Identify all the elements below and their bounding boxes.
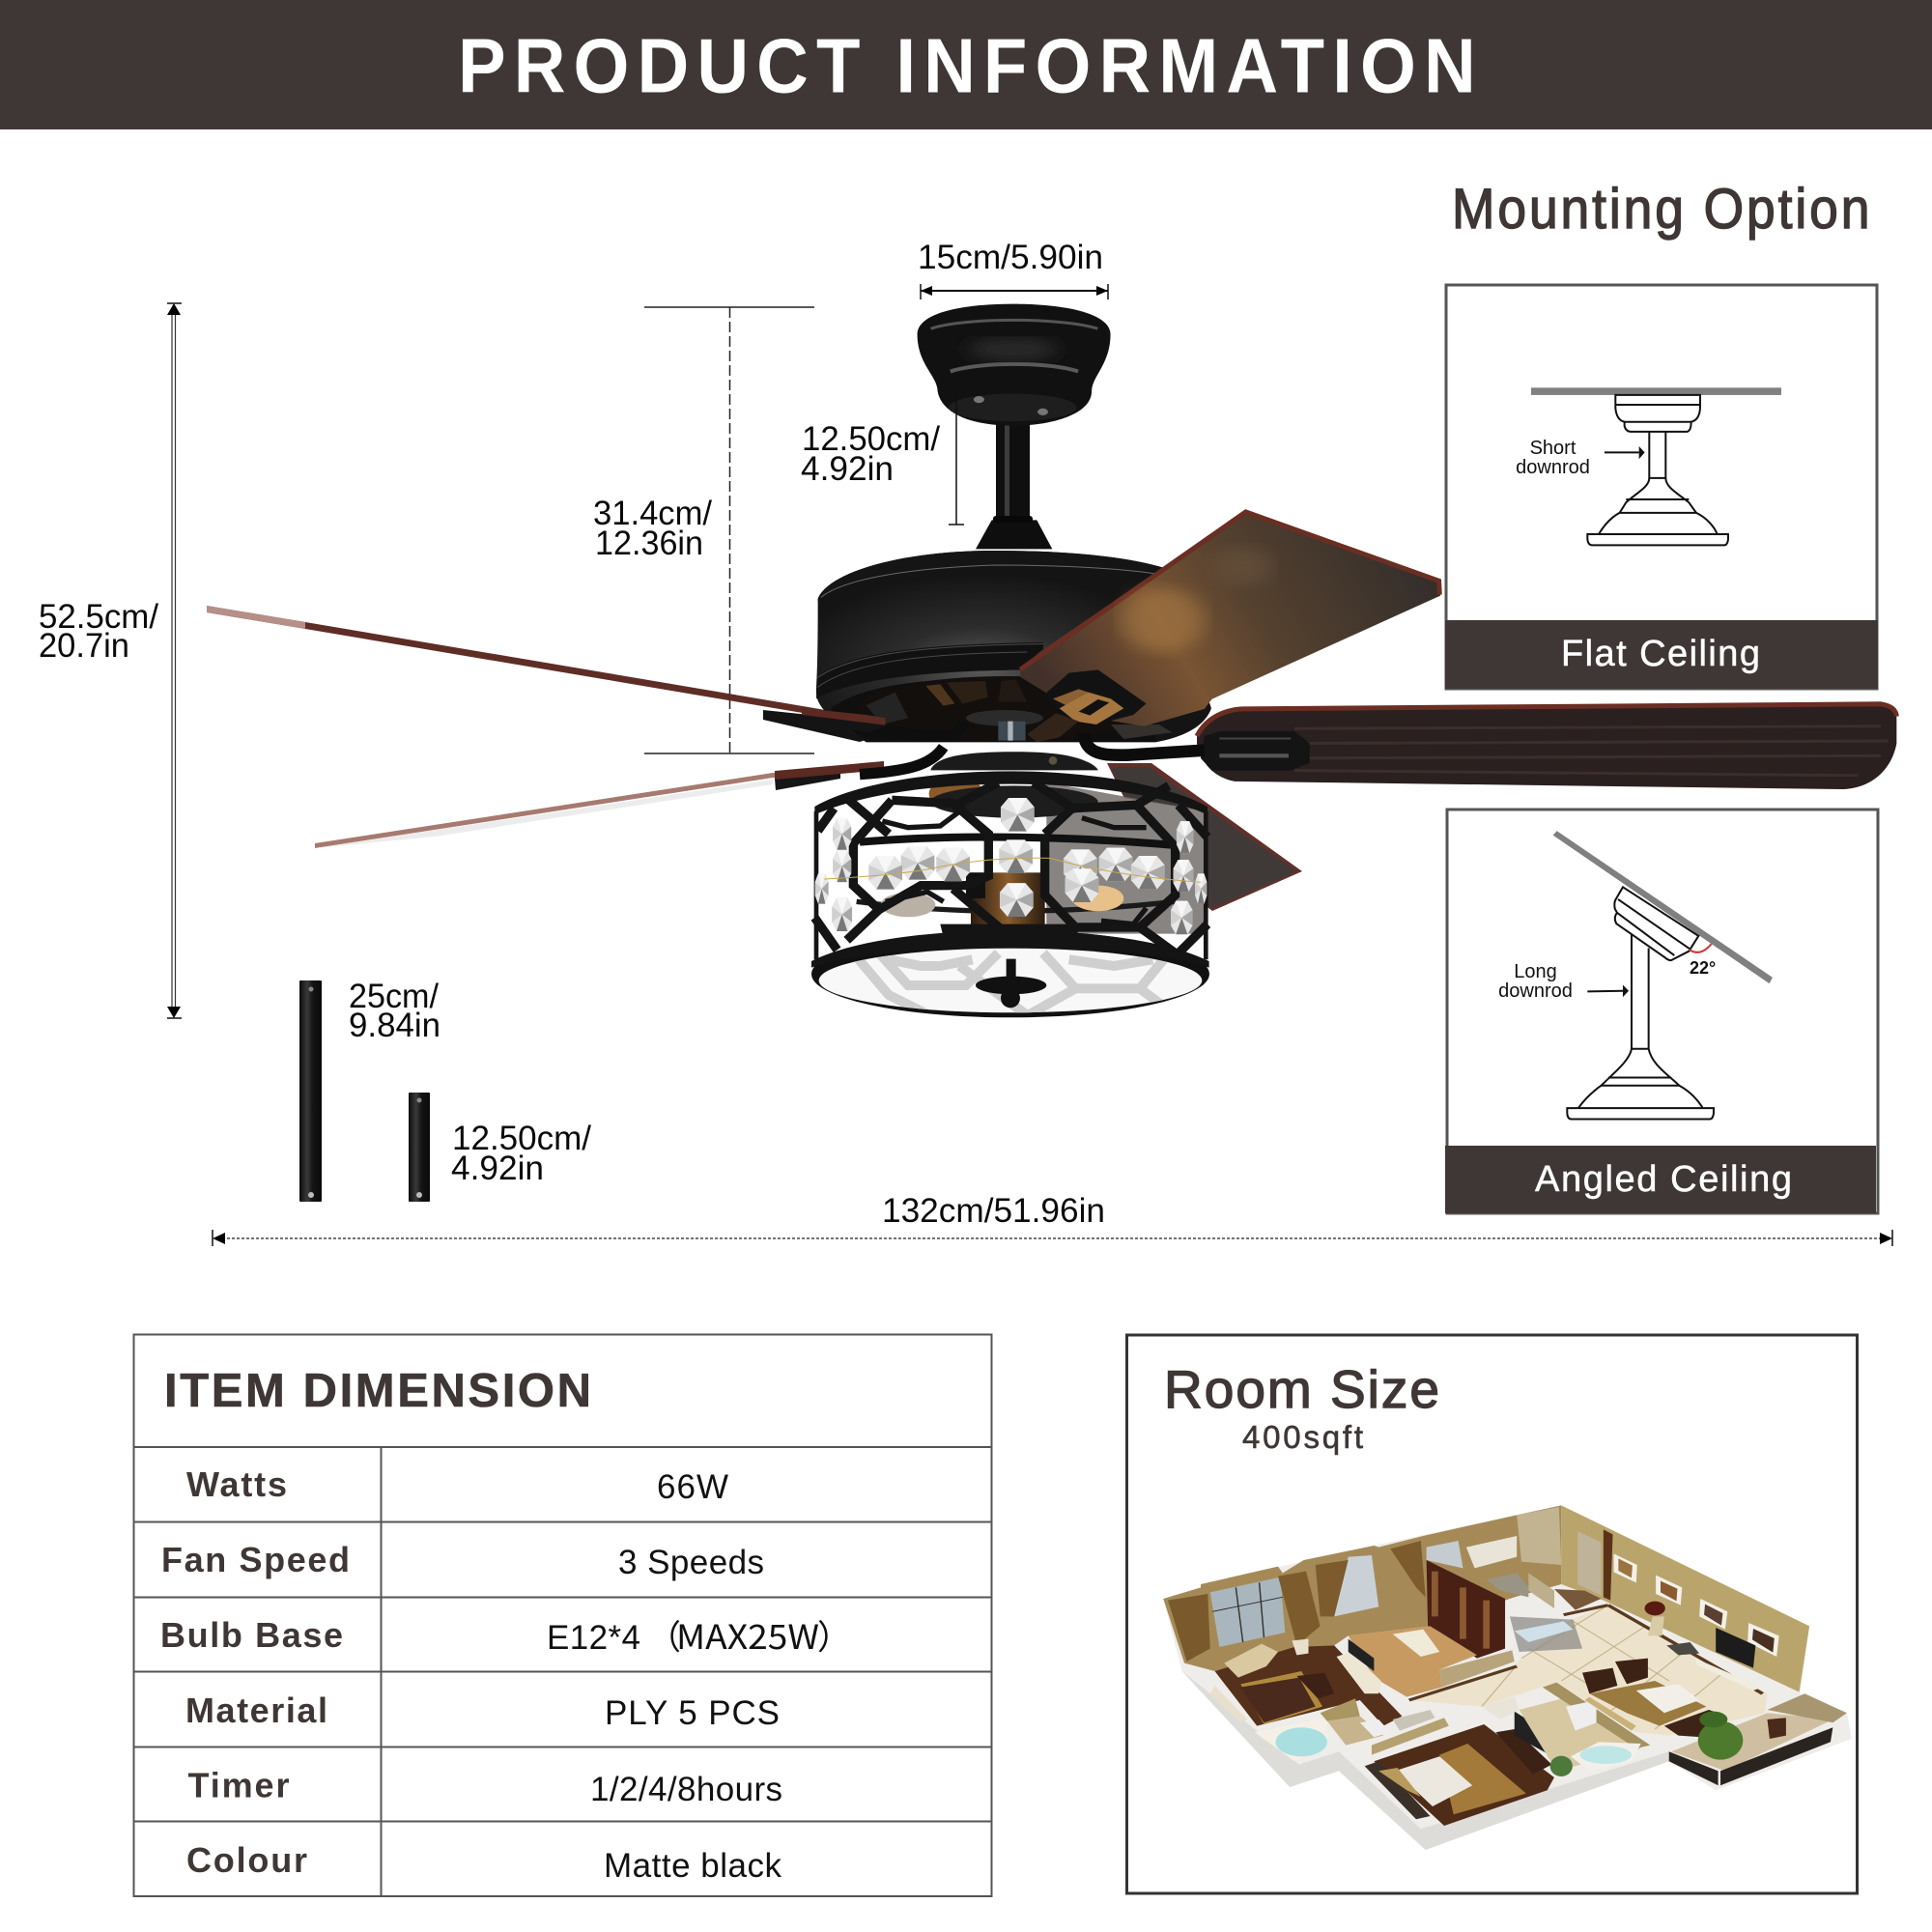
panel: angled ceiling: Long xyxy=(1514,961,1557,982)
overall height dimension: 20.7in xyxy=(39,627,129,665)
long downrod xyxy=(299,978,440,1202)
row: bulb base: ） xyxy=(817,1619,851,1657)
row: material: Material xyxy=(185,1690,327,1730)
panel: angled ceiling: downrod xyxy=(1498,980,1573,1002)
title: PRODUCT INFORMATION xyxy=(458,23,1476,109)
canopy width dimension xyxy=(918,239,1108,299)
row: fan speed: Fan Speed xyxy=(161,1540,350,1579)
panel: room size xyxy=(1126,1335,1857,1893)
fan blade: lower left thin xyxy=(315,761,884,848)
room size heading: Room Size xyxy=(1164,1359,1439,1419)
panel: flat ceiling xyxy=(1445,285,1878,689)
lamp interior xyxy=(814,778,1208,959)
fan blade: upper right with bracket xyxy=(1020,512,1440,726)
row: fan speed xyxy=(161,1540,764,1581)
row: timer xyxy=(187,1766,782,1808)
room size value: 400sqft xyxy=(1242,1419,1363,1455)
canopy drop dimension: 12.50cm/ xyxy=(802,420,940,458)
lattice xyxy=(814,782,1208,959)
long downrod: 9.84in xyxy=(349,1007,440,1044)
body height dimension: 12.36in xyxy=(595,525,703,562)
bottom finial xyxy=(976,959,1046,1008)
fan blade: right horizontal xyxy=(1197,704,1896,789)
panel: angled ceiling xyxy=(1445,810,1878,1213)
lamp cage with crystals xyxy=(811,753,1209,1017)
row: bulb base xyxy=(160,1610,851,1660)
angled ceiling diagram xyxy=(1553,831,1773,1119)
row: watts: 66W xyxy=(657,1468,728,1506)
row: colour: Matte black xyxy=(604,1847,782,1885)
panel: angled ceiling: 22° xyxy=(1690,958,1716,978)
floor plan illustration xyxy=(1163,1505,1852,1850)
ceiling canopy xyxy=(918,304,1111,426)
bottom glass xyxy=(811,930,1209,1017)
row: bulb base: E12*4 xyxy=(547,1619,640,1657)
fan downrod xyxy=(993,386,1033,523)
fan blade: rear right xyxy=(1107,763,1302,911)
row: colour xyxy=(186,1840,782,1885)
table heading: ITEM DIMENSION xyxy=(164,1365,591,1417)
row: fan speed: 3 Speeds xyxy=(618,1544,764,1581)
fan arms and hub xyxy=(802,708,1205,775)
overall width dimension: 132cm/51.96in xyxy=(882,1192,1105,1230)
crystals xyxy=(815,798,1207,934)
row: bulb base: MAX25W xyxy=(676,1610,819,1660)
body height dimension xyxy=(593,307,814,753)
short downrod: 4.92in xyxy=(451,1150,544,1187)
angled ceiling caption: Angled Ceiling xyxy=(1535,1159,1792,1200)
short downrod: 12.50cm/ xyxy=(452,1120,591,1157)
flat ceiling diagram xyxy=(1531,387,1781,545)
row: material xyxy=(185,1690,780,1732)
short downrod xyxy=(409,1093,591,1202)
row: colour: Colour xyxy=(186,1840,307,1880)
overall height dimension: 52.5cm/ xyxy=(39,598,158,636)
panel: item dimension table xyxy=(133,1335,992,1896)
row: bulb base: （ xyxy=(647,1619,681,1657)
row: material: PLY 5 PCS xyxy=(605,1694,780,1732)
panel: flat ceiling: Short xyxy=(1530,438,1577,459)
row: bulb base: Bulb Base xyxy=(160,1615,343,1655)
row: timer: 1/2/4/8hours xyxy=(590,1771,782,1808)
flat ceiling caption: Flat Ceiling xyxy=(1561,634,1760,674)
body height dimension: 31.4cm/ xyxy=(593,495,712,532)
canopy width dimension: 15cm/5.90in xyxy=(918,239,1103,276)
angled ceiling caption xyxy=(1445,1146,1876,1213)
row: watts xyxy=(186,1464,728,1506)
flat ceiling caption xyxy=(1445,620,1878,689)
panel: flat ceiling: downrod xyxy=(1516,457,1590,478)
long downrod: 25cm/ xyxy=(349,978,439,1015)
row: timer: Timer xyxy=(187,1766,290,1804)
fan motor housing xyxy=(816,520,1211,742)
heading: mounting option: Mounting Option xyxy=(1452,178,1869,240)
overall width dimension xyxy=(213,1192,1892,1246)
canopy drop dimension xyxy=(801,386,964,525)
row: watts: Watts xyxy=(186,1464,287,1504)
overall height dimension xyxy=(39,303,182,1018)
canopy drop dimension: 4.92in xyxy=(801,450,894,488)
cage rims xyxy=(811,753,1209,968)
fan blade: upper left thin xyxy=(207,606,884,742)
header band xyxy=(0,0,1932,129)
